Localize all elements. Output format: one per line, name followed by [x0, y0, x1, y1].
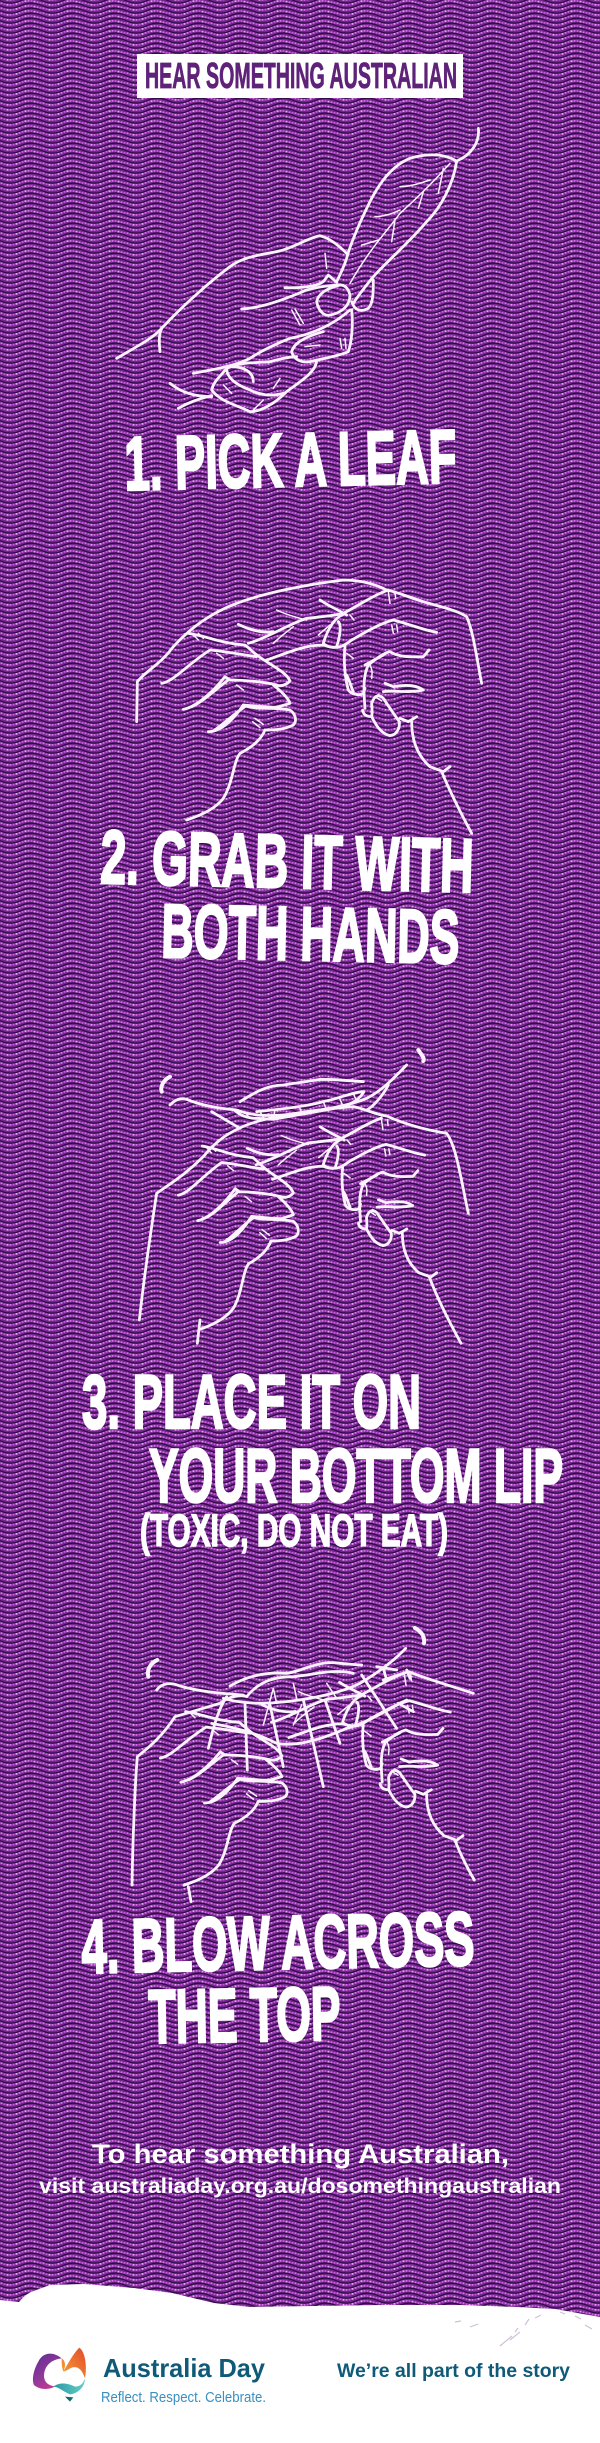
- slogan: We’re all part of the story: [337, 2361, 570, 2382]
- heading: step 3: [82, 1360, 563, 1556]
- call to action text: [39, 2139, 561, 2198]
- heading: step 3: (TOXIC, DO NOT EAT): [140, 1505, 448, 1556]
- illustration: blowing across the leaf: [132, 1628, 474, 1902]
- footer: torn white panel: [0, 2284, 600, 2443]
- call to action text: visit australiaday.org.au/dosomethingaustralian: [39, 2175, 561, 2198]
- call to action text: To hear something Australian,: [92, 2139, 509, 2169]
- logo: Australia Day ribbon map: [33, 2348, 86, 2402]
- illustration: hand picking a leaf: [117, 128, 479, 412]
- logo wordmark and tagline: [101, 2353, 266, 2406]
- heading: step 4: THE TOP: [148, 1972, 341, 2060]
- logo wordmark and tagline: Reflect. Respect. Celebrate.: [101, 2389, 266, 2406]
- header label: Hear Something Australian: [137, 54, 463, 98]
- heading: step 2: [100, 815, 475, 980]
- illustration: leaf held against bottom lip: [139, 1050, 468, 1343]
- illustration: both hands holding the leaf: [137, 580, 482, 833]
- logo wordmark and tagline: Australia Day: [103, 2353, 266, 2383]
- heading: step 4: [81, 1897, 475, 2060]
